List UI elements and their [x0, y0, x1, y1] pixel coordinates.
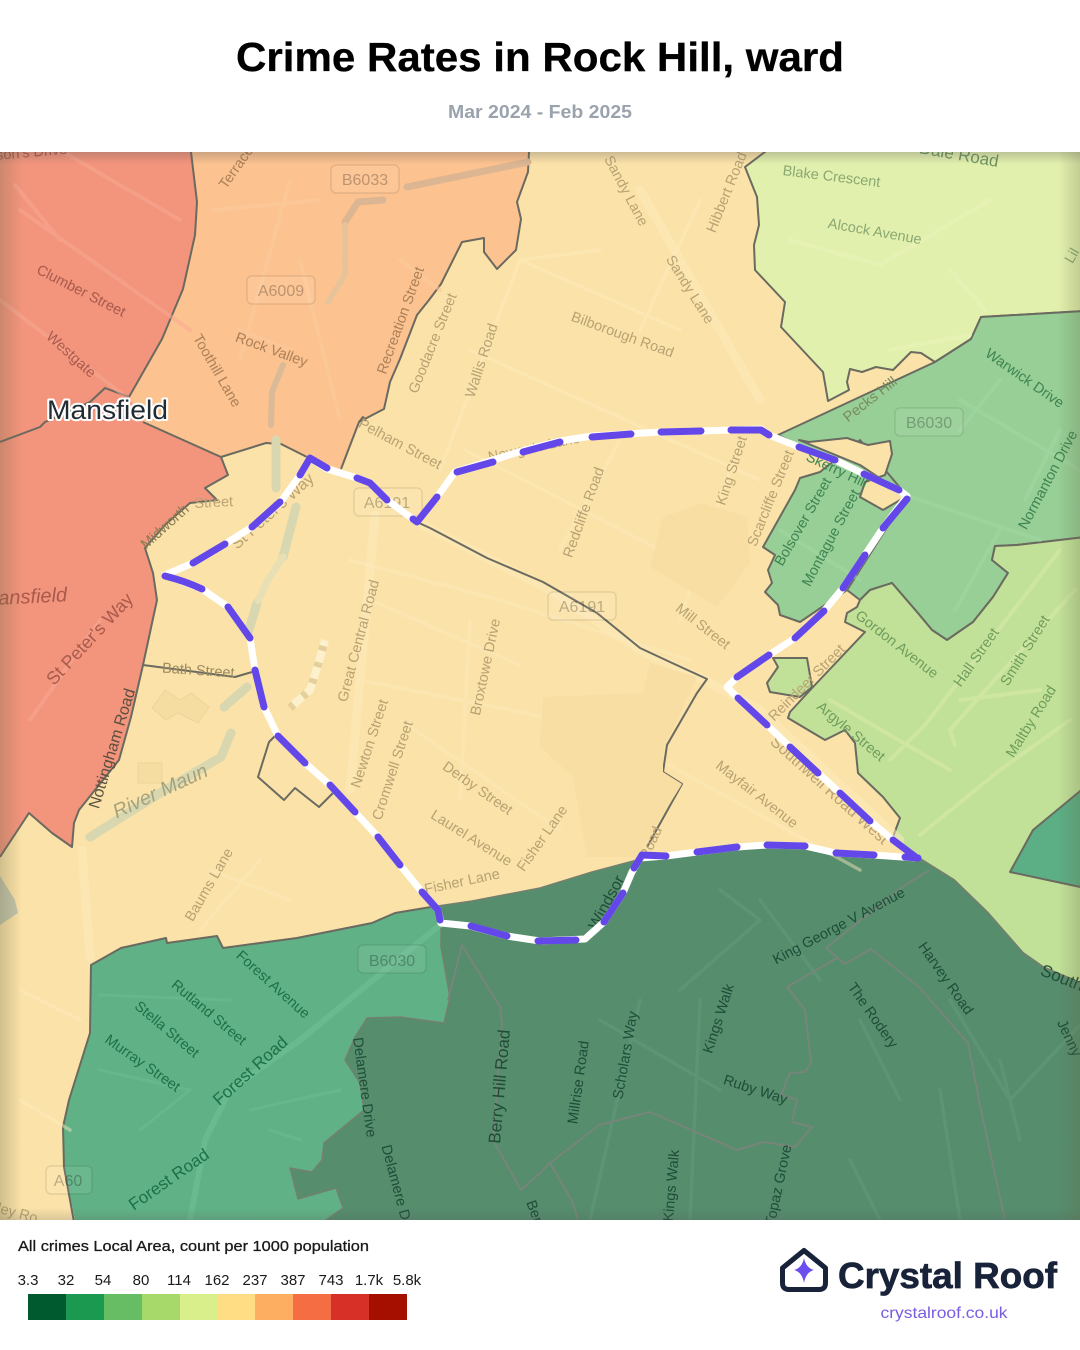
street labels: yellow areas: Broxtowe Drive: [468, 617, 504, 717]
road shields: B6030: [906, 415, 952, 432]
street labels: pale green area: Alcock Avenue: [827, 216, 923, 248]
road shields: A6009: [258, 283, 304, 300]
street labels: yellow areas: Midworth: [138, 501, 193, 553]
legend values: 3.3: [18, 1272, 38, 1289]
street labels: red areas: Nottingham Road: [86, 687, 139, 811]
street labels: forest green area: Forest Avenue: [233, 948, 313, 1022]
street labels: forest green area: Stella Street: [131, 998, 202, 1061]
legend values: 743: [318, 1272, 344, 1289]
street labels: yellow areas: Sandy Lane: [662, 253, 717, 327]
street labels: yellow areas: Sandy Lane: [600, 153, 651, 229]
street labels: dark green area: Delamere Drive: [349, 1036, 379, 1138]
interior dark boundaries: [143, 417, 707, 847]
street labels: pale green area: Blake Crescent: [782, 163, 881, 191]
buildings and parks: [138, 508, 719, 806]
street labels: medium green area: [772, 346, 1080, 589]
street labels: light green area: [813, 608, 1060, 765]
street labels: dark green area: Windsor: [586, 872, 629, 933]
street labels: medium green area: Montague Street: [799, 487, 864, 589]
street labels: dark green area: Scholars Way: [610, 1009, 642, 1100]
choropleth areas: [0, 145, 1080, 1225]
street labels: medium green area: Pecks Hill: [841, 374, 901, 426]
legend values: 114: [167, 1272, 191, 1289]
street labels: yellow areas: Derby Street: [439, 759, 515, 819]
street labels: forest green area: Murray Street: [102, 1032, 183, 1095]
legend values: 237: [242, 1272, 268, 1289]
street labels: dark green area: Kings Walk: [661, 1148, 683, 1222]
street labels: light green area: Maltby Road: [1003, 683, 1060, 761]
road shields: [46, 165, 963, 1194]
street labels: yellow areas: Great Central Road: [335, 578, 383, 704]
street labels: yellow areas: Fisher Lane: [514, 803, 571, 875]
street labels: orange areas: Rock Valley: [233, 330, 310, 371]
street labels: forest green area: Forest Road: [125, 1145, 213, 1214]
street labels: forest green area: Rutland Street: [168, 977, 249, 1049]
street labels: orange areas: [189, 143, 428, 410]
roads and river: [0, 150, 1080, 1220]
street labels: yellow areas: Southwell Road West: [767, 733, 892, 848]
street labels: yellow areas: Cromwell Street: [370, 719, 417, 822]
ward boundary: Rock Hill: [165, 429, 918, 941]
street labels: yellow areas: Hibbert Road: [704, 150, 751, 235]
legend values: 80: [133, 1272, 149, 1289]
street labels: yellow areas: Scarcliffe Street: [745, 448, 798, 549]
street labels: yellow areas: Reindeer Street: [766, 642, 849, 725]
legend title: All crimes Local Area, count per 1000 population: [18, 1238, 369, 1255]
legend values: 162: [204, 1272, 230, 1289]
street labels: yellow areas: Bilborough Road: [569, 309, 676, 361]
street labels: yellow areas: Bath Street: [162, 660, 235, 682]
street labels: orange areas: Recreation Street: [374, 265, 428, 376]
title: Crime Rates in Rock Hill, ward: [236, 34, 844, 80]
street labels: dark green area: Ruby Way: [721, 1072, 790, 1108]
street labels: medium green area: Warwick Drive: [982, 346, 1067, 412]
street labels: red areas: Clumber Street: [34, 262, 128, 321]
logo wordmark: Crystal Roof: [838, 1255, 1058, 1296]
legend values: 54: [95, 1272, 111, 1289]
dark-area boundaries: [448, 870, 1005, 1220]
icon: house with star: [782, 1250, 826, 1290]
street labels: dark green area: Millrise Road: [565, 1040, 593, 1125]
street labels: forest green area: Forest Road: [209, 1033, 291, 1109]
street labels: dark green area: Ber: [522, 1198, 545, 1225]
street labels: yellow areas: Wallis Road: [463, 322, 502, 400]
road shields: B6030: [369, 953, 415, 970]
legend values: 387: [280, 1272, 306, 1289]
street labels: yellow areas: Fisher Lane: [423, 866, 501, 898]
road shields: A6191: [364, 495, 410, 512]
street labels: yellow areas: Street: [194, 494, 234, 512]
street labels: dark green area: The Rodery: [844, 980, 901, 1052]
street labels: yellow areas: River Maun: [109, 760, 211, 823]
street labels: orange areas: Toothill Lane: [189, 332, 244, 410]
street labels: dark green area: [349, 872, 1080, 1227]
map edge shading: [0, 152, 1080, 1220]
street labels: yellow areas: Mill Street: [672, 601, 733, 653]
legend: [18, 1238, 422, 1320]
street labels: dark green area: Topaz Grove: [763, 1143, 795, 1227]
street labels: light green area: Argyle Street: [813, 699, 888, 765]
street labels: dark green area: Harvey Road: [914, 939, 976, 1018]
street labels: yellow areas: St Peter's Way: [228, 470, 318, 553]
street labels: orange areas: Terrace: [216, 143, 257, 192]
street labels: yellow areas: Baums Lane: [182, 846, 237, 924]
grey feature near left edge: [0, 876, 18, 925]
street labels: yellow areas: King Street: [714, 434, 751, 507]
legend colour scale: [28, 1294, 407, 1320]
street labels: yellow areas: Road: [637, 824, 666, 862]
street labels: yellow areas: [0, 150, 892, 1227]
street labels: red areas: St Peter's Way: [42, 589, 137, 689]
legend values: [18, 1272, 422, 1289]
street labels: yellow areas: Laurel Avenue: [428, 807, 515, 870]
street labels: dark green area: Berry Hill Road: [485, 1029, 514, 1144]
street labels: yellow areas: Goodacre Street: [406, 291, 461, 396]
place label: Mansfield: Mansfield: [47, 395, 168, 425]
legend values: 1.7k: [355, 1272, 384, 1289]
street labels: yellow areas: Newgate Lane: [487, 431, 582, 466]
street labels: yellow areas: Mayfair Avenue: [712, 758, 801, 832]
street labels: light green area: Hall Street: [951, 625, 1003, 690]
street labels: medium green area: Bolsover Street: [772, 475, 835, 569]
legend values: 5.8k: [393, 1272, 422, 1289]
street labels: forest green area: [102, 948, 313, 1214]
street labels: medium green area: Normanton Drive: [1016, 428, 1080, 532]
street labels: dark green area: Kings Walk: [700, 981, 738, 1055]
street labels: pale green area: [784, 152, 1079, 264]
street labels: yellow areas: Pelham Street: [356, 416, 444, 473]
street labels: red areas: [0, 142, 139, 811]
street labels: dark green area: King George V Avenue: [770, 885, 908, 968]
road shields: A60: [54, 1173, 82, 1190]
street labels: pale green area: Dale Road: [918, 138, 1000, 171]
road shields: A6191: [559, 599, 605, 616]
street labels: yellow areas: Redcliffe Road: [561, 465, 608, 560]
street labels: dark green area: Delamere Dr: [378, 1143, 414, 1227]
logo: Crystal Roof: [782, 1250, 1058, 1322]
logo url: crystalroof.co.uk: [880, 1305, 1009, 1322]
street labels: yellow areas: Newton Street: [348, 698, 392, 790]
street labels: light green area: Gordon Avenue: [852, 608, 941, 682]
street labels: red areas: Westgate: [43, 329, 99, 381]
road shields: B6033: [342, 172, 388, 189]
legend values: 32: [58, 1272, 74, 1289]
subtitle: date range: Mar 2024 - Feb 2025: [448, 102, 632, 122]
street labels: light green area: Smith Street: [998, 613, 1054, 689]
street labels: medium green area: Skerry Hill: [803, 449, 870, 492]
